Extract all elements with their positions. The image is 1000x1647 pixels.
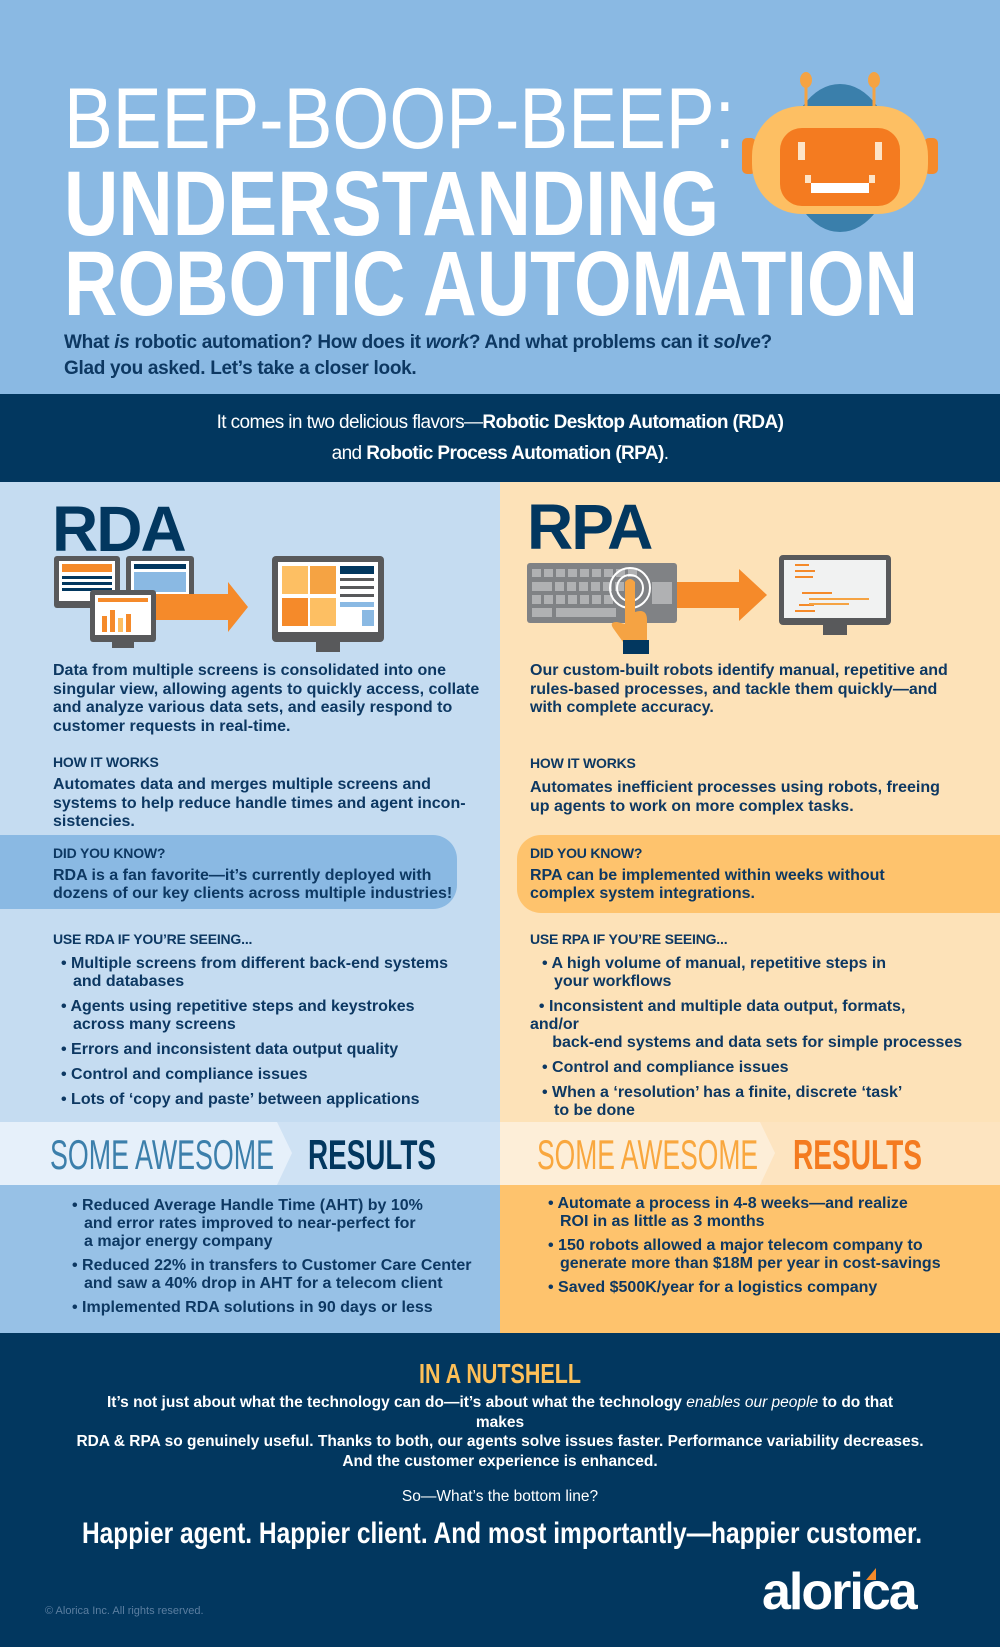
- RPA use list: • Inconsistent and multiple data output, formats,: [539, 998, 905, 1015]
- RDA use list: USE RDA IF YOU’RE SEEING...: [53, 931, 252, 947]
- RDA use list: • Multiple screens from different back-end systems: [61, 955, 448, 972]
- RPA use list: USE RPA IF YOU’RE SEEING...: [530, 931, 727, 947]
- callout: RPA did you know: RPA can be implemented within weeks without: [530, 867, 885, 884]
- callout: RPA did you know: complex system integrations.: [530, 885, 755, 902]
- subtitle: [64, 332, 772, 379]
- results band: RDA: SOME AWESOME: [50, 1131, 274, 1178]
- intro band: [0, 394, 1000, 482]
- subtitle: Glad you asked. Let’s take a closer look.: [64, 358, 416, 379]
- callout: RDA did you know: RDA is a fan favorite—it’s currently deployed with: [53, 867, 431, 884]
- RPA use list: back-end systems and data sets for simple processes: [552, 1034, 962, 1051]
- RDA how it works: HOW IT WORKS: [53, 754, 159, 770]
- RDA how it works: systems to help reduce handle times and agent incon-: [53, 794, 466, 812]
- RDA description: singular view, allowing agents to quickly access, collate: [53, 680, 479, 698]
- RDA use list: and databases: [73, 973, 184, 990]
- results band: RPA: RESULTS: [793, 1131, 922, 1178]
- nutshell paragraph: And the customer experience is enhanced.: [342, 1452, 658, 1470]
- RPA use list: • When a ‘resolution’ has a finite, discrete ‘task’: [542, 1084, 902, 1101]
- RDA description: customer requests in real-time.: [53, 718, 290, 734]
- callout: RPA did you know: [517, 835, 1000, 913]
- RPA description: rules-based processes, and tackle them quickly—and: [530, 680, 937, 698]
- RPA use list: • Control and compliance issues: [542, 1059, 789, 1076]
- nutshell paragraph: makes: [476, 1414, 524, 1430]
- RPA how it works: HOW IT WORKS: [530, 755, 636, 771]
- results list: RPA: • Saved $500K/year for a logistics company: [548, 1279, 877, 1296]
- RPA use list: to be done: [554, 1102, 635, 1119]
- RDA how it works: [53, 754, 466, 830]
- RDA use list: [53, 931, 448, 1108]
- logo: alorica: alorica: [762, 1563, 916, 1621]
- RDA description: and analyze various data sets, and easily respond to: [53, 699, 452, 716]
- icon: keyboard to code monitor: [527, 555, 891, 654]
- copyright: © Alorica Inc. All rights reserved.: [45, 1605, 204, 1617]
- RDA how it works: Automates data and merges multiple screens and: [53, 776, 431, 793]
- panel: nutshell: [0, 1333, 1000, 1647]
- results list: RDA: • Implemented RDA solutions in 90 days or less: [72, 1299, 433, 1316]
- RPA how it works: Automates inefficient processes using robots, freeing: [530, 779, 940, 796]
- RPA how it works: up agents to work on more complex tasks.: [530, 798, 854, 814]
- nutshell paragraph: It’s not just about what the technology can do—it’s about what the technology enables our people to do that: [107, 1394, 893, 1411]
- bottom line question: So—What’s the bottom line?: [402, 1488, 598, 1505]
- intro band: It comes in two delicious flavors—Robotic Desktop Automation (RDA): [217, 412, 783, 433]
- title: [64, 71, 918, 330]
- results list: RDA: [0, 1185, 500, 1333]
- RDA use list: across many screens: [73, 1016, 236, 1033]
- RPA heading: RPA: [527, 491, 651, 563]
- RPA use list: [530, 931, 962, 1119]
- results band: RPA: SOME AWESOME: [537, 1131, 758, 1178]
- icon: multiple screens to one: [54, 556, 384, 652]
- RPA how it works: [530, 755, 940, 814]
- callout: RPA did you know: DID YOU KNOW?: [530, 845, 642, 861]
- RDA heading: RDA: [52, 493, 185, 565]
- RDA description: Data from multiple screens is consolidated into one: [53, 662, 446, 679]
- results list: RPA: • Automate a process in 4-8 weeks—and realize: [548, 1195, 908, 1212]
- title: UNDERSTANDING: [64, 153, 719, 255]
- results list: RDA: and saw a 40% drop in AHT for a telecom client: [84, 1275, 443, 1292]
- RPA use list: your workflows: [554, 973, 671, 990]
- intro band: and Robotic Process Automation (RPA).: [332, 443, 668, 464]
- header background: [0, 0, 1000, 394]
- results band: RPA: [500, 1122, 1000, 1185]
- RPA use list: • A high volume of manual, repetitive steps in: [542, 955, 886, 972]
- results list: RDA: and error rates improved to near-perfect for: [84, 1215, 416, 1232]
- callout: RDA did you know: DID YOU KNOW?: [53, 845, 165, 861]
- title: BEEP-BOOP-BEEP:: [64, 71, 735, 167]
- results list: RPA: [500, 1185, 1000, 1333]
- RPA description: Our custom-built robots identify manual, repetitive and: [530, 662, 948, 679]
- RDA use list: • Control and compliance issues: [61, 1066, 308, 1083]
- subtitle: What is robotic automation? How does it work? And what problems can it solve?: [64, 332, 772, 353]
- RDA how it works: sistencies.: [53, 813, 135, 830]
- results list: RPA: ROI in as little as 3 months: [560, 1213, 764, 1230]
- panel: RPA: [500, 482, 1000, 1122]
- results list: RDA: • Reduced Average Handle Time (AHT) by 10%: [72, 1197, 423, 1214]
- RPA description: with complete accuracy.: [530, 699, 714, 716]
- RDA use list: • Agents using repetitive steps and keystrokes: [61, 998, 415, 1015]
- results list: RPA: generate more than $18M per year in cost-savings: [560, 1255, 941, 1272]
- panel: RDA: [0, 482, 500, 1122]
- nutshell paragraph: [76, 1394, 924, 1470]
- icon: robot: [742, 72, 938, 232]
- RPA description: [530, 662, 948, 716]
- RPA use list: and/or: [530, 1016, 579, 1033]
- RDA use list: • Errors and inconsistent data output quality: [61, 1041, 398, 1058]
- RDA use list: • Lots of ‘copy and paste’ between applications: [61, 1091, 420, 1108]
- results band: RDA: [0, 1122, 500, 1185]
- results band: RDA: RESULTS: [308, 1131, 436, 1178]
- callout: RDA did you know: dozens of our key clients across multiple industries!: [53, 885, 452, 902]
- nutshell heading: IN A NUTSHELL: [419, 1358, 581, 1389]
- results list: RDA: • Reduced 22% in transfers to Customer Care Center: [72, 1257, 472, 1274]
- callout: RDA did you know: [0, 835, 457, 909]
- nutshell paragraph: RDA & RPA so genuinely useful. Thanks to both, our agents solve issues faster. Performance variability decreases.: [76, 1433, 924, 1450]
- RDA description: [53, 662, 479, 734]
- results list: RPA: • 150 robots allowed a major telecom company to: [548, 1237, 923, 1254]
- results list: RDA: a major energy company: [84, 1233, 273, 1250]
